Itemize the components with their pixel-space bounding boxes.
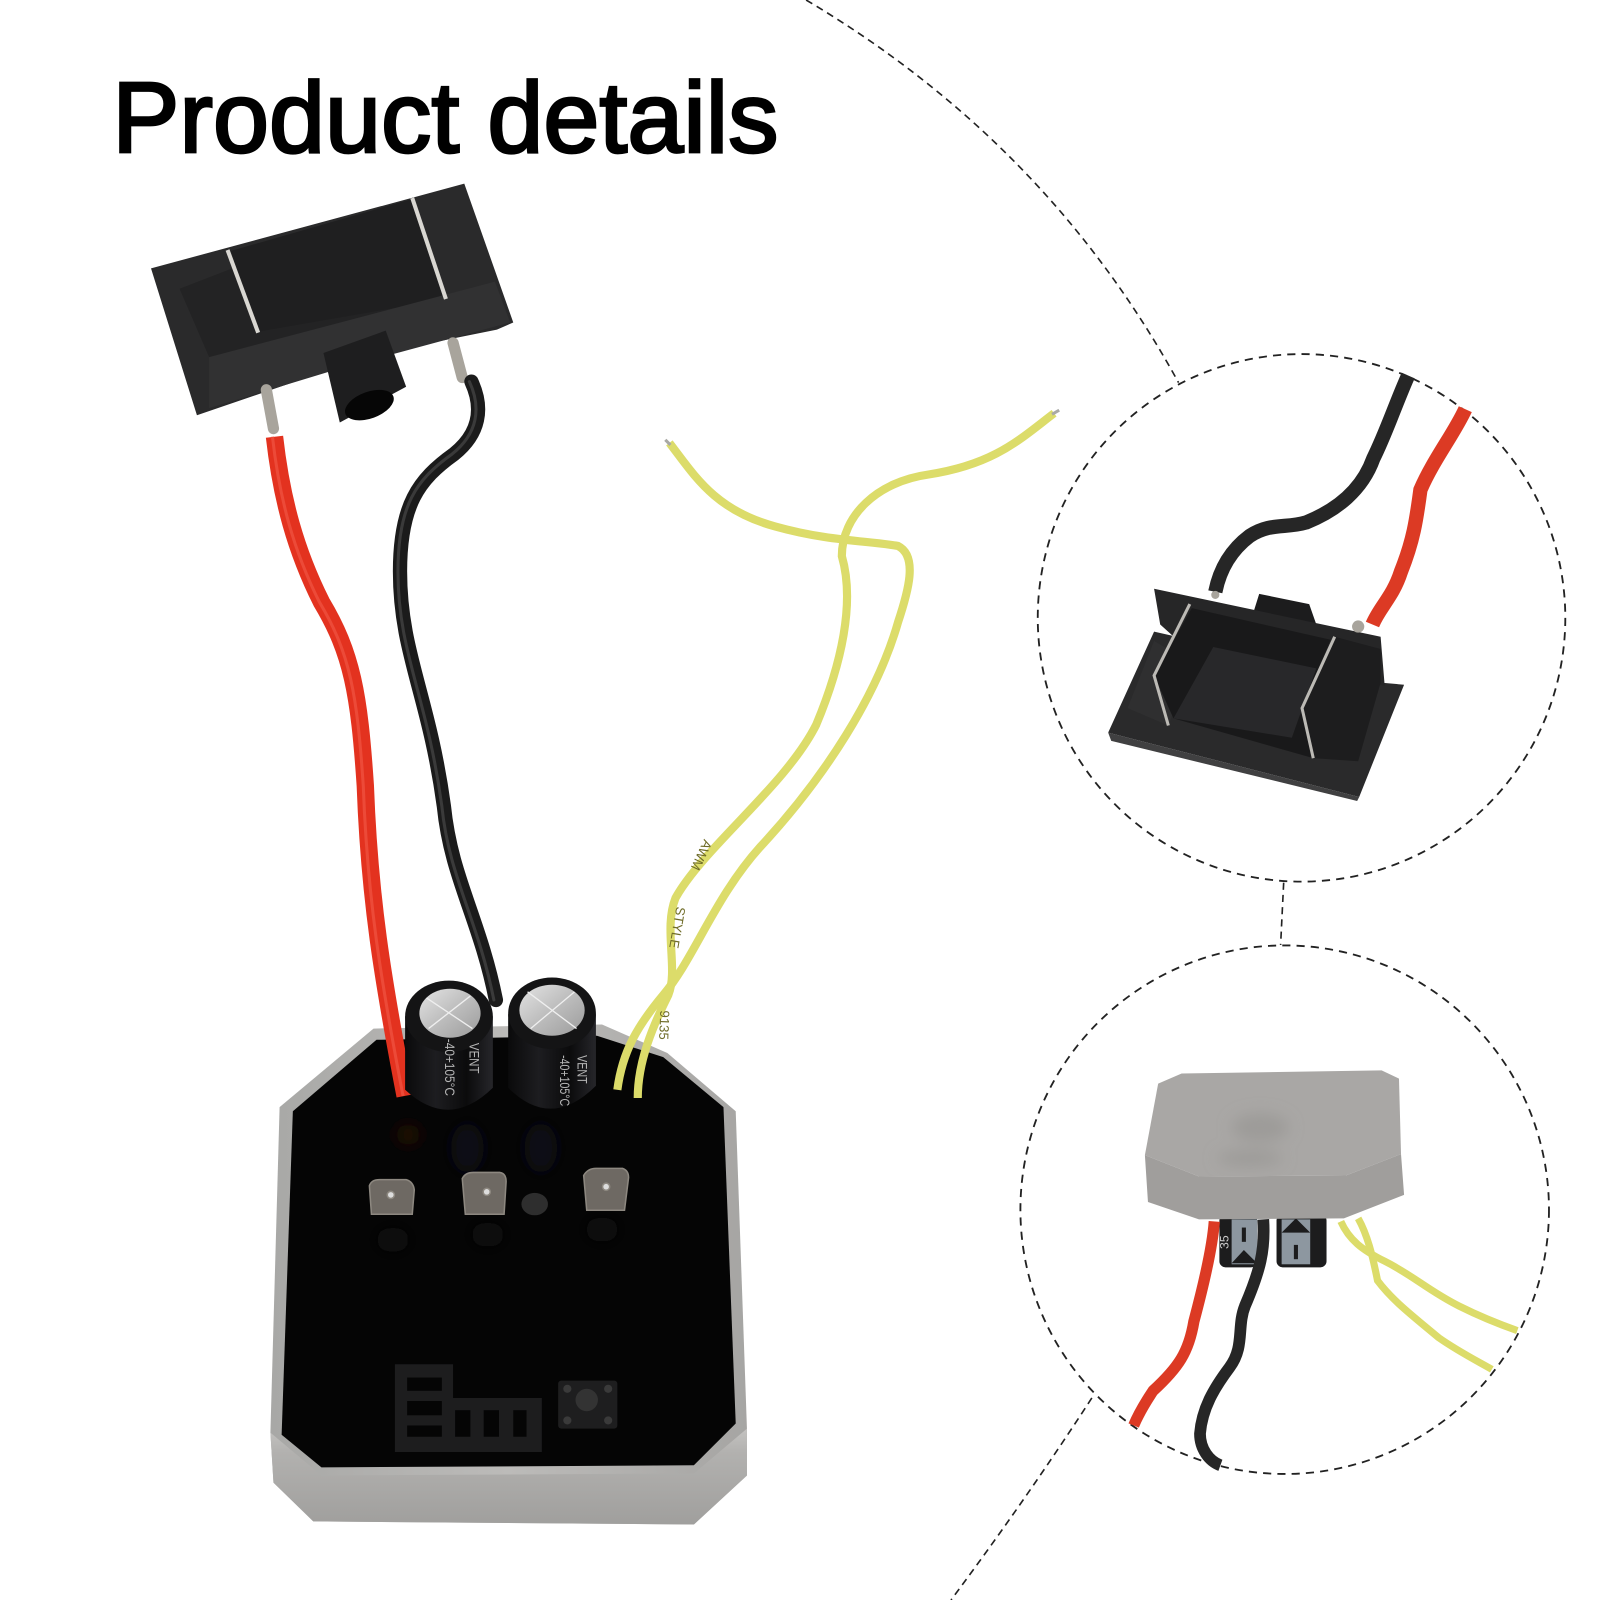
black wire xyxy=(1200,1219,1264,1465)
dashed arc: top to first circle xyxy=(806,0,1179,383)
capacitor right xyxy=(508,978,596,1109)
dashed ring xyxy=(1020,945,1549,1474)
tinned wire tips xyxy=(665,410,1059,445)
base plate xyxy=(1108,632,1404,797)
aluminium base xyxy=(270,1024,747,1524)
red wire xyxy=(272,437,405,1096)
aluminium plate top xyxy=(1145,1070,1401,1177)
dashed connector between circles xyxy=(1281,883,1284,945)
plate surface blotches xyxy=(1217,1113,1289,1166)
panel reflections xyxy=(377,1123,618,1252)
plug connector xyxy=(151,184,513,429)
red wire xyxy=(1372,409,1465,624)
capacitors underside xyxy=(1218,1214,1327,1267)
solder points xyxy=(1211,591,1364,633)
capacitor right markings: -40+105°C xyxy=(556,1055,572,1106)
capacitor left xyxy=(405,981,493,1110)
tact switch xyxy=(558,1381,617,1429)
wire print text: STYLE xyxy=(666,906,688,950)
black wire xyxy=(398,382,496,1000)
yellow wires xyxy=(1341,1218,1517,1369)
wire print text: 9135 xyxy=(656,1010,672,1040)
wire print text xyxy=(656,838,715,1040)
black wire xyxy=(1215,376,1408,592)
detail circle: connector view xyxy=(1038,354,1565,882)
wire print text: AWM xyxy=(688,838,715,873)
epoxy black panel xyxy=(282,1036,736,1467)
dashed arc: second circle to bottom xyxy=(951,1398,1092,1600)
capacitor right markings xyxy=(556,1055,590,1106)
capacitor left markings xyxy=(441,1039,481,1096)
red wire xyxy=(1134,1221,1214,1426)
capacitor left markings: -40+105°C xyxy=(441,1039,457,1096)
connector square tab xyxy=(323,331,406,426)
solder pins xyxy=(266,343,462,429)
capacitor voltage text: 35 xyxy=(1218,1235,1232,1249)
capacitor left markings: VENT xyxy=(465,1043,481,1074)
back wall xyxy=(1154,589,1385,686)
lower side face xyxy=(270,1429,747,1524)
metal blades xyxy=(1154,604,1335,758)
solder blob xyxy=(521,1193,548,1215)
connector body xyxy=(1108,589,1404,801)
black header block xyxy=(395,1364,542,1452)
main product: controller board with wires xyxy=(151,184,1059,1524)
aluminium plate front xyxy=(1145,1154,1404,1219)
capacitor right markings: VENT xyxy=(574,1055,590,1084)
title: Product details xyxy=(112,62,779,174)
spade terminals xyxy=(369,1168,629,1214)
connector metal blades xyxy=(228,198,446,333)
dashed ring xyxy=(1038,354,1565,882)
detail circle: rear view of board xyxy=(1020,945,1549,1474)
yellow wires xyxy=(617,413,1054,1098)
